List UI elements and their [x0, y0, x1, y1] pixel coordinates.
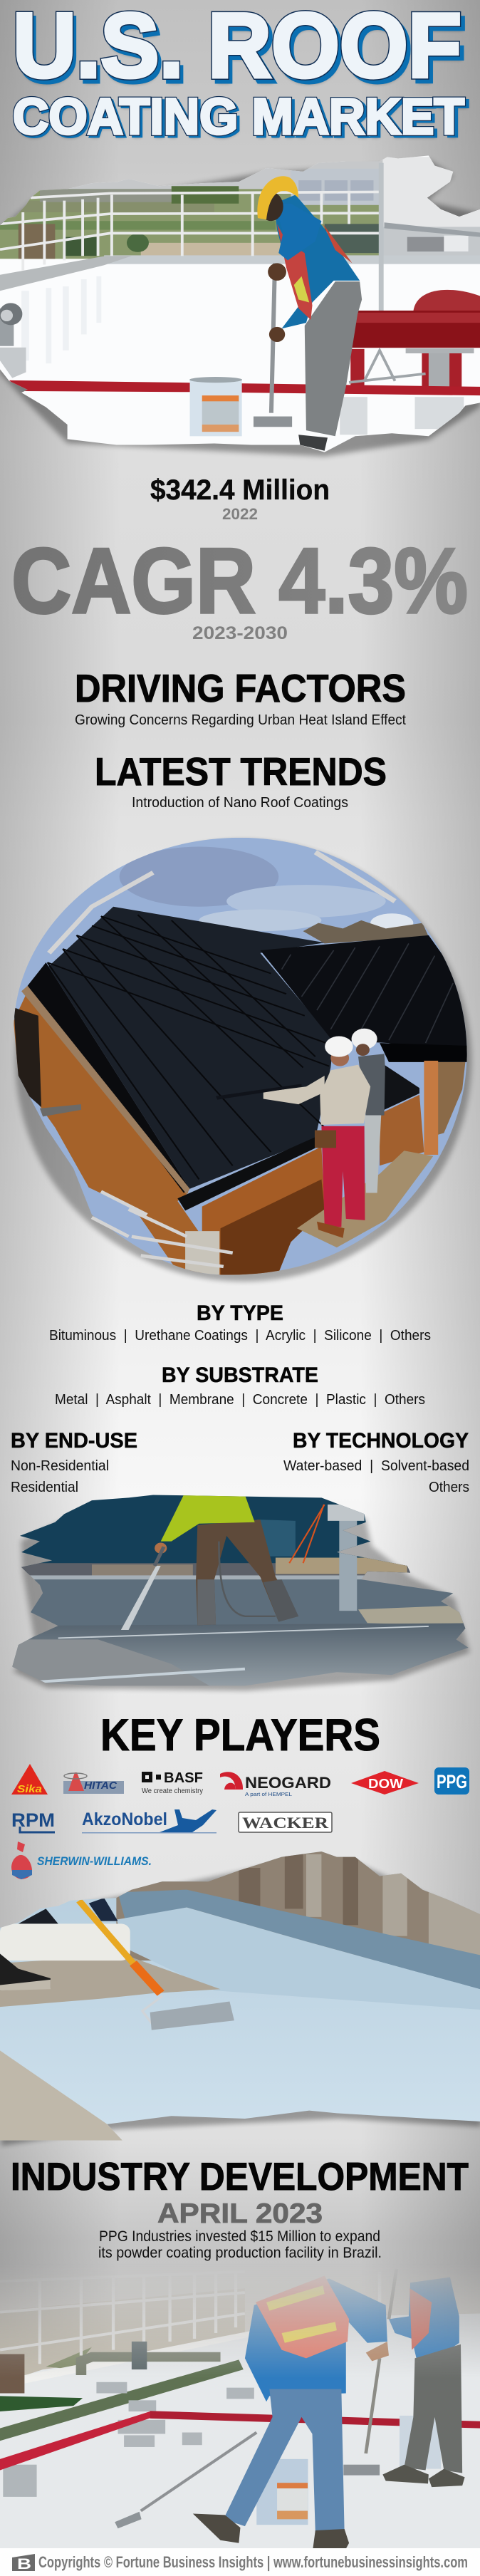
segment: by technology: Others — [429, 1480, 469, 1495]
logo: Wacker — [239, 1812, 332, 1832]
logo: BASF: BASF — [164, 1770, 203, 1786]
title: COATING MARKET — [15, 91, 468, 147]
logo: Neogard — [220, 1772, 331, 1797]
logo: Sherwin-Williams: SHERWIN-WILLIAMS. — [37, 1854, 152, 1868]
logo: Neogard: NEOGARD — [245, 1774, 331, 1792]
latest trends: Introduction of Nano Roof Coatings — [132, 795, 348, 811]
title: U.S. ROOF — [16, 0, 466, 101]
segment: by substrate: BY SUBSTRATE — [162, 1364, 318, 1387]
logo: Sika — [11, 1764, 48, 1795]
photo: workers on black metal roof — [0, 828, 480, 1291]
segment: by substrate — [55, 1364, 425, 1408]
CAGR: 2023-2030 — [192, 623, 288, 643]
logo: Wacker: WACKER — [242, 1814, 329, 1832]
logo: AkzoNobel — [82, 1809, 216, 1834]
market value: 2022 — [222, 505, 258, 523]
industry development: APRIL 2023 — [157, 2198, 323, 2229]
market value — [150, 474, 330, 523]
segment: by end-use — [11, 1429, 137, 1495]
title: COATING MARKET — [13, 89, 464, 145]
logo: Neogard: A part of HEMPEL — [245, 1792, 292, 1797]
logo: BASF — [142, 1770, 203, 1795]
segment: by technology — [283, 1429, 469, 1495]
segment: by substrate: Metal | Asphalt | Membrane | Concrete | Plastic | Others — [55, 1392, 425, 1408]
segment: by technology: BY TECHNOLOGY — [293, 1429, 469, 1453]
logo: Dow — [351, 1771, 419, 1795]
title: COATING MARKET — [13, 89, 464, 145]
logo: PPG: PPG — [437, 1771, 467, 1792]
latest trends: LATEST TRENDS — [95, 749, 387, 794]
driving factors: DRIVING FACTORS — [75, 666, 406, 710]
photo: workers rolling coating on roof — [0, 2260, 480, 2549]
segment: by technology: Water-based | Solvent-based — [283, 1458, 469, 1474]
logo: Sherwin-Williams — [11, 1842, 152, 1879]
photo: worker pressure washing roof — [0, 1492, 480, 1691]
logo: AkzoNobel: AkzoNobel — [82, 1809, 167, 1829]
logo: Dow: DOW — [368, 1777, 403, 1791]
heading: key players: KEY PLAYERS — [100, 1710, 380, 1760]
title — [13, 0, 468, 149]
logo: Sika: Sika — [17, 1783, 42, 1795]
driving factors — [75, 666, 406, 728]
logo: PPG — [434, 1767, 469, 1795]
industry development: its powder coating production facility in Brazil. — [98, 2245, 382, 2261]
logo: BASF: We create chemistry — [142, 1787, 203, 1795]
photo: worker coating a white roof — [0, 145, 480, 465]
icon: Fortune Business Insights logo — [12, 2554, 35, 2572]
segment: by type: BY TYPE — [197, 1302, 283, 1325]
segment: by type: Bituminous | Urethane Coatings | Acrylic | Silicone | Others — [49, 1328, 431, 1344]
industry development: PPG Industries invested $15 Million to expand — [99, 2228, 380, 2245]
icon: Fortune Business Insights logo: B — [17, 2556, 31, 2572]
logo: Hitac: HITAC — [84, 1780, 118, 1792]
industry development — [11, 2154, 469, 2261]
market value: $342.4 Million — [150, 474, 330, 506]
title: COATING MARKET — [15, 93, 468, 149]
segment: by end-use: Non-Residential — [11, 1458, 109, 1474]
footer — [0, 2548, 480, 2576]
latest trends — [95, 749, 387, 811]
photo: roller applying coating on flat roof — [0, 1846, 480, 2146]
logo: Hitac — [63, 1772, 124, 1794]
segment: by type — [49, 1302, 431, 1344]
title: U.S. ROOF — [16, 1, 466, 103]
segment: by end-use: BY END-USE — [11, 1429, 137, 1453]
driving factors: Growing Concerns Regarding Urban Heat Island Effect — [75, 712, 406, 728]
logo: RPM: RPM — [11, 1809, 55, 1831]
segment: by end-use: Residential — [11, 1480, 78, 1495]
logos — [11, 1764, 469, 1879]
